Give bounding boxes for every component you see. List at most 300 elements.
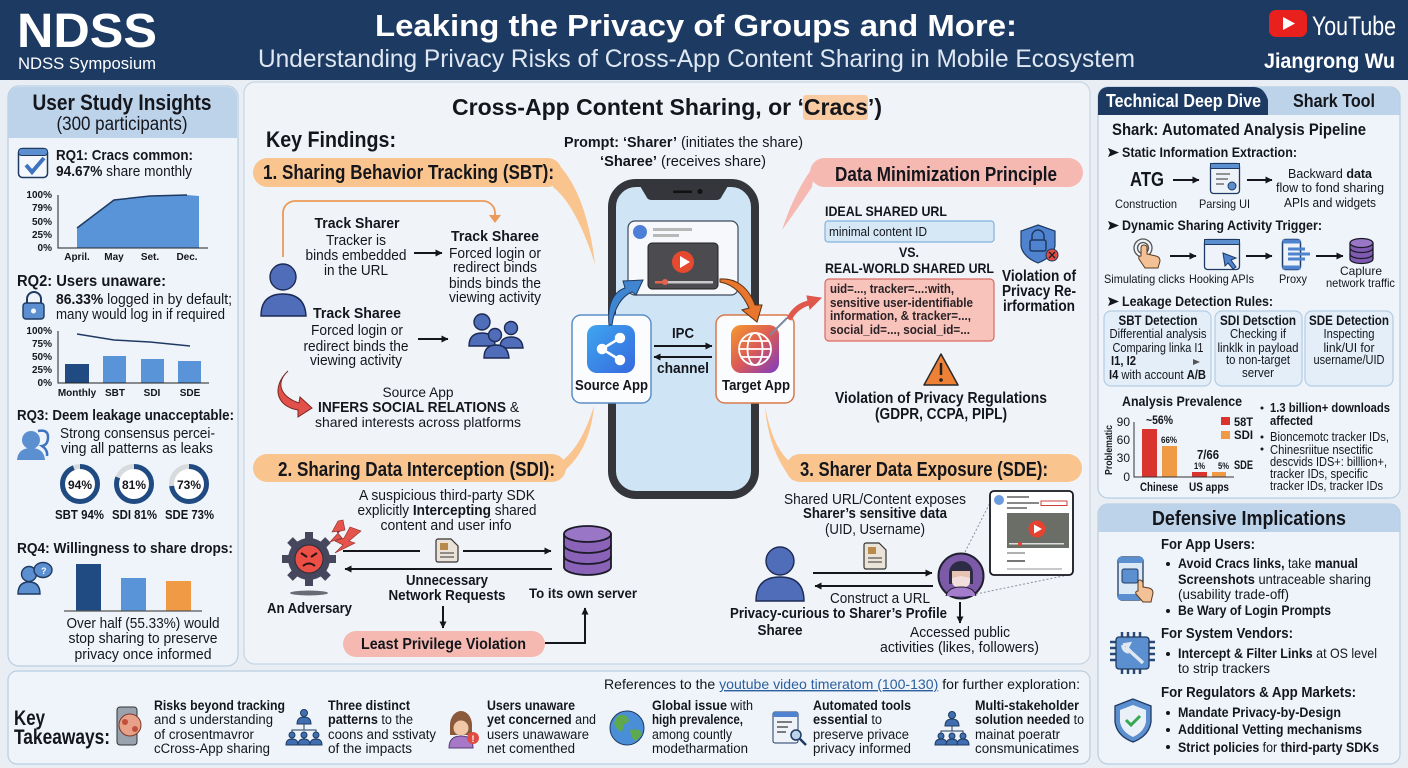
bar chart: RQ2: Monthly	[58, 388, 97, 399]
subtitle: Understanding Privacy Risks of Cross-App Content Sharing in Mobile Ecosystem	[258, 45, 1135, 73]
track sharee text top: binds binds the	[449, 275, 541, 292]
card: SDE detection: SDE Detection	[1309, 312, 1389, 328]
track sharer text: binds embedded	[306, 247, 406, 264]
icon: automated tools	[773, 712, 806, 745]
bar chart: prevalence: 5%	[1218, 461, 1229, 471]
RQ3 text	[60, 425, 215, 457]
arrows: sharee and adversary	[813, 573, 933, 586]
bar chart: RQ2: SDI	[144, 388, 161, 399]
accessed text	[880, 624, 1039, 656]
takeaway: users unaware: Users unaware	[487, 698, 575, 713]
icon: concerned user: !	[472, 734, 474, 744]
icon: globe	[610, 711, 644, 745]
icon: YouTube logo	[1269, 10, 1396, 41]
donut charts: RQ3: 94%	[68, 478, 92, 492]
title highlight	[803, 95, 868, 120]
track sharee text top: viewing activity	[449, 289, 541, 306]
icon: masked attacker	[938, 554, 984, 598]
IPC channel: channel	[657, 360, 709, 377]
RQ1 text: RQ1: Cracs common:	[56, 147, 193, 164]
area chart: RQ1: 79%	[32, 203, 52, 214]
card: SDI detection	[1215, 311, 1302, 386]
icon: capture database	[1326, 238, 1395, 290]
construct URL text: Sharee	[758, 622, 802, 639]
accessed text: Accessed public	[910, 624, 1010, 641]
track sharer text: Tracker is	[326, 232, 386, 249]
ideal URL: minimal content ID	[829, 224, 927, 239]
leakage rules heading: Leakage Detection Rules:	[1122, 293, 1273, 309]
takeaway: global issue: among countly	[652, 727, 732, 742]
icon: group of sharees	[469, 314, 523, 358]
system vendors text: to strip trackers	[1178, 660, 1270, 676]
pill: least privilege violation: Least Privilege Violation	[361, 636, 526, 653]
icon: alert lightning	[330, 520, 361, 553]
ATG label: ATG	[1130, 169, 1164, 191]
arrow	[1316, 255, 1343, 257]
prevalence bullets: Bioncemotc tracker IDs,	[1270, 430, 1389, 444]
takeaway: users unaware: users unawaware	[487, 727, 589, 742]
NDSS logo: NDSS	[17, 5, 157, 58]
dynamic trigger heading: Dynamic Sharing Activity Trigger:	[1122, 217, 1322, 233]
takeaway: patterns: patterns to the	[328, 712, 413, 727]
arrow	[1246, 255, 1272, 257]
takeaway: users unaware	[487, 698, 596, 756]
icon: adversary gear	[282, 532, 336, 596]
card: SDE detection: Inspecting	[1324, 327, 1375, 341]
icon: phone with hand	[1118, 557, 1153, 602]
bar chart: RQ2: 75%	[32, 339, 52, 350]
ideal URL: IDEAL SHARED URL	[825, 203, 947, 219]
pill: data minimization heading: Data Minimization Principle	[835, 164, 1057, 186]
app users text: (usability trade-off)	[1178, 586, 1289, 602]
SDE description: Shared URL/Content exposes	[784, 491, 966, 508]
RQ4 text: privacy once informed	[74, 646, 212, 663]
icon: warning triangle	[924, 354, 958, 385]
card: target app: Target App	[722, 377, 790, 394]
icon: chip with wrench	[1110, 632, 1155, 674]
card: SDI detection: SDI Detsction	[1220, 312, 1296, 328]
heading: cracs: Cross-App Content Sharing, or ‘Cracs’)	[452, 94, 882, 120]
bar chart: prevalence: 90	[1117, 415, 1130, 429]
app users text: Be Wary of Login Prompts	[1178, 602, 1331, 618]
bar chart: prevalence: 58T	[1234, 415, 1254, 429]
area chart: RQ1: Dec.	[176, 252, 198, 263]
real-world URL: sensitive user-identifiable	[830, 295, 973, 310]
exposed post card	[990, 491, 1073, 575]
panel: key takeaways	[8, 671, 1090, 764]
takeaway: patterns: of the impacts	[328, 741, 412, 756]
construct URL text: Construct a URL	[830, 590, 930, 607]
icon: sharer person	[261, 264, 306, 316]
ideal URL	[825, 203, 994, 242]
takeaway: global issue	[652, 698, 753, 756]
SDE description	[784, 491, 966, 538]
bar chart: prevalence: ~56%	[1146, 413, 1173, 427]
RQ4 heading: RQ4: Willingness to share drops:	[17, 540, 233, 557]
track sharee text top	[449, 228, 541, 306]
takeaway: patterns: Three distinct	[328, 698, 410, 713]
heading: key takeaways: Key	[14, 707, 45, 730]
bar chart: prevalence	[1103, 413, 1254, 494]
takeaway: risks: and s understanding	[154, 712, 273, 727]
arrow down	[442, 606, 444, 628]
icon: padlock	[23, 292, 44, 319]
backward data flow	[1276, 166, 1384, 210]
icon: shield check	[1115, 699, 1151, 742]
icon: document	[436, 539, 458, 562]
RQ4 text: stop sharing to preserve	[68, 630, 218, 647]
bar chart: RQ2	[26, 326, 209, 399]
RQ4 text	[66, 615, 220, 663]
donut charts: RQ3: 81%	[122, 478, 146, 492]
arrow: source to content	[609, 280, 643, 325]
bar chart: RQ2: 50%	[32, 352, 52, 363]
phone illustration	[612, 183, 755, 495]
static extraction heading: Static Information Extraction:	[1122, 144, 1297, 160]
panel: technical deep dive	[1098, 87, 1400, 498]
RQ3 heading: RQ3: Deem leakage unacceptable:	[17, 407, 234, 424]
takeaway: users unaware: yet concerned and	[487, 712, 596, 727]
takeaway: risks: Risks beyond tracking	[154, 698, 285, 713]
icon: parsing UI: Parsing UI	[1199, 197, 1250, 211]
violation of privacy text: Privacy Re-	[1002, 283, 1076, 300]
prevalence bullets: tracker IDs, specific	[1270, 467, 1368, 481]
real-world URL: information, & tracker=...,	[830, 308, 971, 323]
arrow	[418, 338, 448, 340]
RQ1 text: 94.67% share monthly	[56, 163, 192, 180]
regulations text: Violation of Privacy Regulations	[835, 390, 1047, 407]
participant count: (300 participants)	[56, 114, 188, 135]
prevalence bullets: affected	[1270, 413, 1313, 428]
icon: user with question bubble	[18, 562, 52, 594]
SDI description: explicitly Intercepting shared	[358, 502, 536, 519]
arrow	[1173, 179, 1199, 181]
versus label: VS.	[899, 244, 919, 260]
takeaway: risks	[154, 698, 285, 756]
SDE description: Sharer’s sensitive data	[803, 505, 948, 522]
RQ2 heading: RQ2: Users unaware:	[17, 273, 166, 290]
heading: analysis prevalence: Analysis Prevalence	[1122, 393, 1242, 409]
track sharee text top: Forced login or	[449, 245, 541, 262]
card: SBT detection: SBT Detection	[1118, 312, 1198, 328]
panel: cross-app content sharing	[244, 82, 1090, 664]
takeaway: multi-stakeholder: consmunicatimes	[975, 741, 1079, 756]
system vendors text: For System Vendors:	[1161, 625, 1293, 642]
SDI description: content and user info	[380, 517, 512, 534]
prompt text	[564, 134, 803, 170]
area chart: RQ1: May	[104, 252, 124, 263]
adversary label: An Adversary	[267, 600, 353, 617]
card: SBT detection: Differential analysis	[1110, 327, 1206, 341]
card: SDE detection: link/UI for	[1324, 341, 1374, 355]
area chart: RQ1: 100%	[26, 190, 52, 201]
arrow: violation to server	[545, 608, 585, 643]
icon: sharee person	[756, 547, 804, 601]
area chart: RQ1	[26, 190, 208, 263]
bar chart: prevalence: US apps	[1189, 480, 1229, 494]
arrow: infers relations	[278, 371, 312, 417]
app users text: Screenshots untraceable sharing	[1178, 571, 1371, 587]
bar chart: RQ4	[64, 564, 202, 611]
icon: database	[564, 526, 611, 575]
bar chart: RQ2: 100%	[26, 326, 52, 337]
infers text: INFERS SOCIAL RELATIONS &	[318, 399, 519, 416]
card: source app	[572, 315, 651, 403]
donut charts: RQ3: SBT 94%	[55, 507, 104, 522]
icon: proxy phone	[1279, 240, 1310, 286]
arrow: content to target	[720, 279, 762, 322]
takeaway: multi-stakeholder: mainat poeratr	[975, 727, 1060, 742]
tab: technical deep dive: Technical Deep Dive	[1106, 91, 1261, 111]
track sharer text	[306, 215, 406, 279]
real-world URL: REAL-WORLD SHARED URL	[825, 260, 994, 276]
header banner	[0, 0, 1408, 80]
track sharer text: in the URL	[324, 262, 388, 279]
card: SBT detection: I4 with account A/B	[1109, 368, 1206, 382]
track sharee text bottom	[304, 305, 408, 369]
backward data flow: flow to fond sharing	[1276, 180, 1384, 195]
dashed zoom lines	[965, 493, 1068, 594]
donut charts: RQ3: SDE 73%	[165, 507, 214, 522]
icon: capture database: Caplure	[1340, 264, 1382, 278]
arrow	[1247, 179, 1272, 181]
RQ2 text	[56, 291, 232, 323]
prompt text: Prompt: ‘Sharer’ (initiates the share)	[564, 134, 803, 151]
takeaway: global issue: modetharmation	[652, 741, 748, 756]
area chart: RQ1: 0%	[38, 243, 52, 254]
prompt text: ‘Sharee’ (receives share)	[600, 153, 766, 170]
app users text: Avoid Cracs links, take manual	[1178, 555, 1358, 571]
RQ3 text: ving all patterns as leaks	[61, 440, 213, 457]
bar chart: prevalence: 7/66	[1197, 447, 1219, 462]
bar chart: prevalence: 0	[1123, 470, 1130, 484]
NDSS Symposium caption: NDSS Symposium	[18, 54, 156, 73]
takeaway: risks: cCross-App sharing	[154, 741, 270, 756]
heading: user study insights: User Study Insights	[32, 90, 212, 115]
icon: confused user	[17, 431, 48, 460]
area chart: RQ1: 50%	[32, 217, 52, 228]
icon: calendar check	[18, 148, 48, 178]
takeaway: multi-stakeholder	[975, 698, 1084, 756]
app users text: For App Users:	[1161, 536, 1255, 553]
icon: proxy phone: Proxy	[1279, 272, 1307, 286]
SDE description: (UID, Username)	[825, 521, 925, 538]
takeaway: automated tools: preserve privace	[813, 727, 909, 742]
pill: SBT heading	[253, 158, 595, 264]
network requests label: Unnecessary	[406, 572, 489, 589]
real-world URL	[825, 260, 994, 341]
takeaway: global issue: high prevalence,	[652, 712, 743, 727]
takeaway: automated tools: Automated tools	[813, 698, 911, 713]
prevalence bullets: tracker IDs, tracker IDs	[1270, 479, 1383, 493]
donut charts: RQ3: SDI 81%	[112, 507, 157, 522]
system vendors text: Intercept & Filter Links at OS level	[1178, 645, 1377, 661]
RQ2 text: 86.33% logged in by default;	[56, 291, 232, 308]
regulations text: (GDPR, CCPA, PIPL)	[875, 406, 1007, 423]
card: SDE detection	[1305, 311, 1393, 386]
card: SDE detection: username/UID	[1314, 353, 1384, 367]
RQ1 text	[56, 147, 193, 180]
title: Leaking the Privacy of Groups and More:	[375, 8, 1017, 43]
card: source app: Source App	[575, 377, 648, 394]
presenter name: Jiangrong Wu	[1264, 50, 1395, 73]
phone notch	[640, 186, 728, 200]
tab: technical deep dive	[1098, 87, 1268, 115]
heading: defensive implications: Defensive Implications	[1152, 508, 1346, 530]
app users text	[1161, 536, 1371, 618]
takeaway: global issue: Global issue with	[652, 698, 753, 713]
bar chart: prevalence: SDI	[1234, 428, 1253, 442]
SDI description	[358, 487, 536, 534]
icon: hooking window: Hooking APIs	[1189, 272, 1254, 286]
track sharee text top: Track Sharee	[451, 228, 539, 245]
takeaway: patterns	[328, 698, 436, 756]
icon: concerned user	[449, 711, 479, 748]
violation of privacy text: Violation of	[1002, 268, 1077, 285]
pill: SBT heading: 1. Sharing Behavior Tracking (SBT):	[263, 162, 554, 184]
icon: user with question bubble: ?	[41, 566, 46, 576]
area chart: RQ1: 25%	[32, 230, 52, 241]
violation of privacy text	[1002, 268, 1077, 315]
arrow down	[959, 602, 961, 623]
regulators text: Strict policies for third-party SDKs	[1178, 739, 1379, 755]
arrow	[1170, 255, 1196, 257]
takeaway: automated tools: privacy informed	[813, 741, 911, 756]
heading: key takeaways: Takeaways:	[14, 726, 110, 749]
icon: tap hand: Simulating clicks	[1104, 272, 1185, 286]
tab: shark tool: Shark Tool	[1293, 91, 1375, 111]
icon: parsing UI	[1199, 164, 1250, 211]
icon: capture database: network traffic	[1326, 276, 1395, 290]
panel: user study insights	[8, 86, 238, 666]
real-world URL: social_id=..., social_id=...	[830, 322, 970, 337]
icon: shield with lock	[1021, 225, 1058, 263]
takeaway: automated tools	[813, 698, 911, 756]
RQ2 text: many would log in if required	[56, 306, 225, 323]
network requests label	[388, 572, 506, 604]
pill: SDE heading	[765, 406, 1082, 482]
card: SDI detection: to non-target	[1226, 353, 1290, 367]
track sharee text bottom: Forced login or	[311, 322, 403, 339]
takeaway: multi-stakeholder: Multi-stakeholder	[975, 698, 1080, 713]
backward data flow: APIs and widgets	[1284, 195, 1376, 210]
arrows: adversary to server	[343, 551, 552, 569]
RQ4 text: Over half (55.33%) would	[66, 615, 220, 632]
track sharee text bottom: redirect binds the	[304, 338, 408, 355]
pill: SDI heading: 2. Sharing Data Interception (SDI):	[278, 459, 555, 481]
track sharee text bottom: Track Sharee	[313, 305, 401, 322]
arrow: target leak stub	[770, 318, 787, 335]
heading: key findings: Key Findings:	[266, 127, 396, 152]
card: SDI detection: Checking if	[1230, 327, 1286, 341]
regulations text	[835, 390, 1047, 423]
card: SBT detection	[1104, 311, 1211, 386]
pill: data minimization heading	[782, 158, 1083, 230]
bar chart: RQ2: 25%	[32, 365, 52, 376]
infers text	[315, 384, 521, 430]
heading: key takeaways	[14, 707, 110, 749]
bar chart: prevalence: SDE	[1234, 458, 1253, 472]
card: SDI detection: linklk in payload	[1218, 341, 1299, 355]
area chart: RQ1: April.	[64, 252, 90, 263]
card: target app	[716, 315, 794, 403]
donut charts: RQ3: 73%	[177, 478, 201, 492]
track sharee text top: redirect binds	[453, 259, 537, 276]
accessed text: activities (likes, followers)	[880, 639, 1039, 656]
pill: SDE heading: 3. Sharer Data Exposure (SDE):	[800, 459, 1048, 481]
IPC channel	[654, 325, 712, 377]
prevalence bullets	[1260, 400, 1390, 493]
infers text: shared interests across platforms	[315, 414, 521, 430]
icon: document	[864, 543, 886, 569]
arrow: sharer to sharee tracking	[283, 201, 495, 257]
server label: To its own server	[529, 585, 638, 601]
SDI description: A suspicious third-party SDK	[359, 487, 535, 504]
takeaway: risks: of crosentmavror	[154, 727, 254, 742]
area chart: RQ1: Set.	[141, 252, 159, 263]
takeaway: multi-stakeholder: solution needed to	[975, 712, 1084, 727]
bar chart: prevalence: Chinese	[1140, 480, 1178, 494]
prevalence bullets: descvids IDS+: billlion+,	[1270, 455, 1387, 469]
ATG label	[1115, 169, 1177, 211]
regulators text	[1161, 684, 1379, 755]
ATG label: Construction	[1115, 197, 1177, 211]
pill: least privilege violation	[343, 631, 545, 657]
bar chart: RQ2: 0%	[38, 378, 52, 389]
panel: defensive implications	[1098, 504, 1400, 764]
bar chart: RQ2: SBT	[105, 388, 125, 399]
RQ3 text: Strong consensus percei-	[60, 425, 215, 442]
system vendors text	[1161, 625, 1377, 676]
arrow: target to shared url	[787, 296, 821, 320]
construct URL text: Privacy-curious to Sharer’s Profile	[730, 605, 947, 622]
real-world URL: uid=..., tracker=...:with,	[830, 281, 954, 296]
heading: pipeline: Shark: Automated Analysis Pipeline	[1112, 120, 1366, 139]
arrowhead: tracking	[489, 215, 501, 223]
violation of privacy text: irformation	[1003, 298, 1075, 315]
icon: hooking window	[1189, 240, 1254, 286]
bar chart: prevalence: Problematic	[1103, 425, 1115, 475]
shared content card	[628, 221, 738, 295]
takeaway: users unaware: net comenthed	[487, 741, 575, 756]
network requests label: Network Requests	[388, 587, 506, 604]
bar chart: RQ2: SDE	[180, 388, 201, 399]
IPC channel: IPC	[672, 325, 694, 342]
card: SBT detection: I1, I2	[1111, 354, 1136, 368]
bar chart: prevalence: 1%	[1194, 461, 1205, 471]
bar chart: prevalence: 60	[1117, 433, 1130, 447]
card: SBT detection: Comparing linka I1	[1112, 341, 1204, 355]
track sharer text: Track Sharer	[314, 215, 400, 232]
icon: stakeholders	[935, 712, 969, 745]
prevalence bullets: 1.3 billion+ downloads	[1270, 400, 1390, 415]
pill: SDI heading	[253, 406, 594, 482]
track sharee text bottom: viewing activity	[310, 352, 402, 369]
icon: hierarchy	[286, 710, 322, 745]
takeaway: automated tools: essential to	[813, 712, 882, 727]
arrow	[414, 252, 442, 254]
icon: risks	[117, 707, 141, 745]
card: SDI detection: server	[1242, 366, 1274, 380]
donut charts: RQ3	[55, 466, 214, 522]
regulators text: Additional Vetting mechanisms	[1178, 721, 1362, 737]
regulators text: Mandate Privacy-by-Design	[1178, 704, 1341, 720]
infers text: Source App	[382, 384, 454, 400]
construct URL text	[730, 590, 947, 639]
icon: tap hand	[1104, 239, 1185, 286]
regulators text: For Regulators & App Markets:	[1161, 684, 1356, 701]
bar chart: prevalence: 66%	[1161, 435, 1177, 445]
